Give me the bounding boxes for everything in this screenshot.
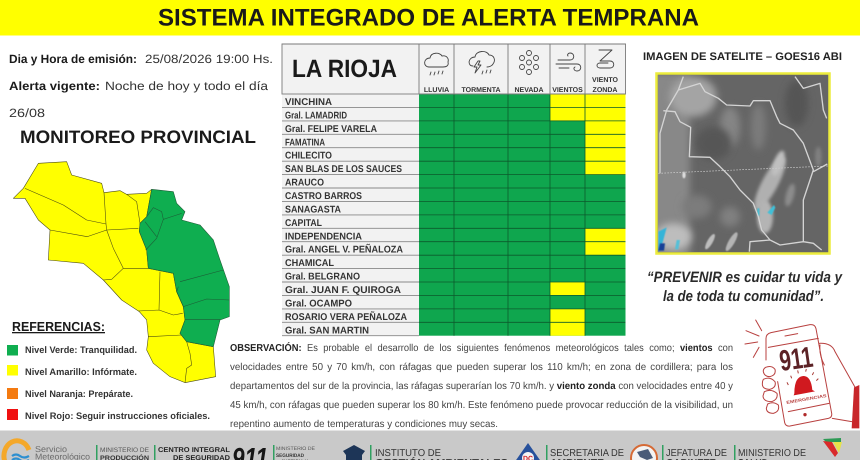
fingers — [762, 367, 779, 413]
title banner — [0, 0, 860, 36]
footer logos strip — [0, 430, 860, 460]
sleeve — [852, 385, 859, 428]
yellow departments — [13, 162, 216, 383]
legend item: orange: Nivel Naranja: Prepárate. — [25, 389, 133, 400]
prevention quote: la de toda tu comunidad”. — [663, 288, 824, 305]
district names: Gral. BELGRANO — [285, 272, 360, 283]
district names: Gral. FELIPE VARELA — [285, 124, 377, 135]
district names: Gral. LAMADRID — [285, 110, 347, 122]
logo: security ministry: SEGURIDAD — [276, 453, 304, 459]
logo: meteorological service — [4, 441, 90, 460]
observation text — [230, 342, 733, 430]
district names: ARAUCO — [285, 178, 324, 189]
logo: institute — [370, 445, 508, 460]
icon: zonda wind — [597, 50, 614, 68]
province name: LA RIOJA — [292, 55, 397, 83]
emission date and alert validity: Alerta vigente: — [9, 79, 100, 93]
district names: INDEPENDENCIA — [285, 231, 362, 242]
legend item: yellow: Nivel Amarillo: Infórmate. — [25, 367, 137, 378]
district names: FAMATINA — [285, 137, 325, 148]
logo: production ministry — [96, 445, 150, 460]
district names: Gral. ANGEL V. PEÑALOZA — [285, 244, 403, 256]
logo: meteorological service: Servicio — [35, 444, 67, 454]
state borders — [660, 77, 827, 252]
logo: cabinet office — [662, 445, 727, 460]
observation text: departamentos del sur de la provincia, las ráfagas superarían los 70 km/h. y viento zonda con velocidades entre 40 y — [230, 381, 733, 392]
cold cloud tops — [658, 227, 667, 251]
phone body — [766, 325, 832, 426]
district names: ROSARIO VERA PEÑALOZA — [285, 311, 407, 323]
legend: references — [7, 319, 210, 422]
district names: SAN BLAS DE LOS SAUCES — [285, 164, 402, 175]
logo: environment secretariat: SECRETARIA DE — [550, 448, 624, 459]
table header — [282, 44, 626, 94]
signal lines — [745, 320, 762, 357]
heading: provincial monitoring: MONITOREO PROVINCIAL — [20, 127, 256, 147]
logo: security ministry: MINISTERIO DE — [276, 446, 316, 452]
province alert map — [13, 162, 229, 383]
observation text: velocidades entre 50 y 70 km/h, con ráfagas que pueden superar los 110 km/h; en zona de cordillera; para los — [230, 362, 733, 373]
observation text: OBSERVACIÓN: Es probable el desarrollo de los siguientes fenómenos meteorológicos tales como; vientos con — [230, 342, 733, 354]
logo: production ministry: MINISTERIO DE — [100, 447, 150, 454]
district names: CHILECITO — [285, 151, 332, 162]
logo: civil defence — [514, 443, 542, 460]
logo: 911 security centre: CENTRO INTEGRAL — [158, 447, 231, 454]
district names: CASTRO BARROS — [285, 191, 362, 202]
911 number: 911 — [777, 340, 815, 377]
logo: health ministry: MINISTERIO DE — [738, 448, 806, 459]
hand — [819, 343, 856, 422]
district names: VINCHINA — [285, 97, 332, 108]
emission date and alert validity: Noche de hoy y todo el día — [105, 79, 268, 93]
logo: cabinet office: JEFATURA DE — [666, 448, 727, 459]
logo: institute: INSTITUTO DE — [375, 448, 441, 459]
district names: CHAMICAL — [285, 258, 334, 269]
table header: NEVADA — [514, 87, 544, 94]
satellite image — [650, 73, 830, 260]
prevention quote: “PREVENIR es cuidar tu vida y — [647, 269, 843, 286]
observation text: repentino aumento de temperaturas y condiciones muy secas. — [230, 419, 498, 430]
logo: police shield — [343, 445, 365, 460]
table header: TORMENTA — [461, 87, 501, 94]
district names: Gral. SAN MARTIN — [285, 325, 369, 336]
emission date and alert validity — [9, 52, 273, 120]
prevention quote — [647, 269, 843, 305]
table header: ZONDA — [593, 87, 617, 94]
icon: 911 phone in hand — [745, 320, 859, 428]
district name column — [282, 94, 419, 336]
cloud field — [650, 73, 828, 260]
logo: 911 security centre — [154, 443, 268, 460]
observation text: 45 km/h, con ráfagas que pueden superar los 80 km/h. Este fenómeno puede provocar reducción de la visibilidad, un — [230, 400, 733, 411]
icon: wind — [556, 53, 581, 71]
emergency label: EMERGENCIAS — [786, 393, 827, 405]
logo: health ministry — [734, 445, 806, 460]
icon: snow — [520, 50, 538, 74]
logo: security ministry — [273, 445, 316, 460]
satellite heading: IMAGEN DE SATELITE – GOES16 ABI — [643, 51, 842, 63]
green departments — [139, 189, 229, 347]
table header: VIENTOS — [552, 87, 583, 94]
icon: storm — [469, 51, 494, 74]
legend: references: REFERENCIAS: — [12, 319, 105, 334]
risk grid — [419, 94, 626, 336]
logo: environment secretariat — [546, 445, 624, 460]
emission date and alert validity: 26/08 — [9, 106, 45, 120]
legend item: green: Nivel Verde: Tranquilidad. — [25, 345, 137, 356]
district names: CAPITAL — [285, 218, 322, 229]
table header: LLUVIA — [424, 87, 449, 94]
siren — [794, 376, 815, 395]
district names: Gral. OCAMPO — [285, 298, 352, 309]
legend item: red: Nivel Rojo: Seguir instrucciones oficiales. — [25, 411, 210, 422]
emission date and alert validity: 25/08/2026 19:00 Hs. — [145, 52, 273, 66]
district names — [285, 97, 407, 336]
district names: Gral. JUAN F. QUIROGA — [285, 285, 401, 296]
emission date and alert validity: Dia y Hora de emisión: — [9, 52, 137, 66]
alert table — [282, 44, 626, 336]
icon: rain — [425, 53, 448, 75]
district names: SANAGASTA — [285, 204, 341, 215]
logo: round orange emblem — [631, 445, 657, 460]
title banner: SISTEMA INTEGRADO DE ALERTA TEMPRANA — [158, 4, 699, 32]
logo: provincial emblem — [823, 438, 842, 457]
table header: VIENTO — [592, 77, 619, 84]
